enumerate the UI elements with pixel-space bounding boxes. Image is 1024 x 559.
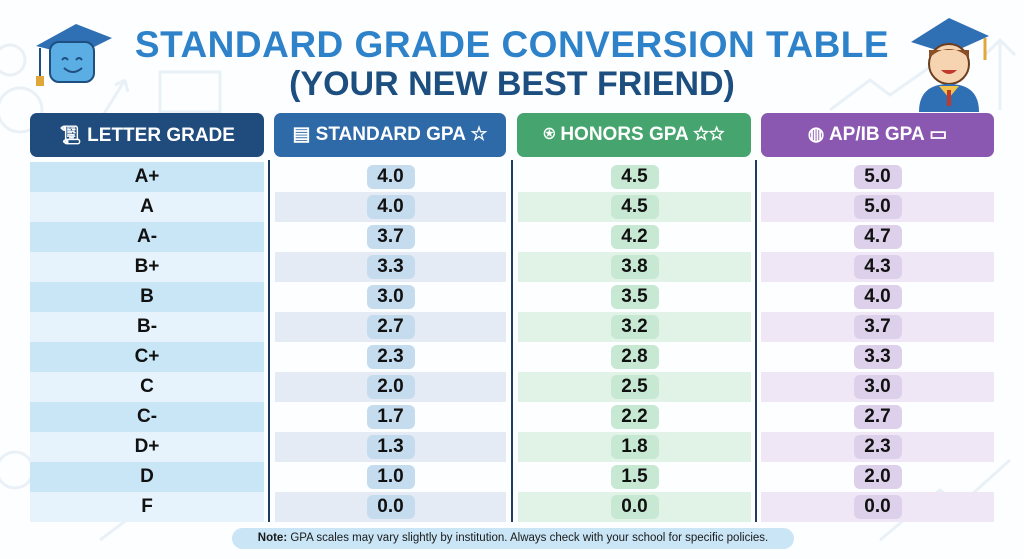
- header: standard gpa: ▤ STANDARD GPA ☆: [292, 124, 488, 145]
- table rows: 1.3: [377, 436, 404, 457]
- table rows: C+: [135, 346, 159, 367]
- table rows: 3.0: [377, 286, 404, 307]
- table rows: C: [140, 376, 154, 397]
- header: letter grade: [30, 113, 264, 157]
- table rows: 0.0: [377, 496, 404, 517]
- table rows: 2.3: [377, 346, 404, 367]
- table rows: A: [140, 196, 154, 217]
- header: ap/ib gpa: [761, 113, 994, 157]
- icon: smiling graduation cap: [36, 24, 112, 86]
- table rows: 3.7: [864, 316, 891, 337]
- header: standard gpa: [274, 113, 506, 157]
- table rows: 3.2: [621, 316, 648, 337]
- table rows: D: [140, 466, 154, 487]
- table rows: 5.0: [864, 166, 891, 187]
- icon: graduate student: [911, 18, 989, 112]
- table rows: 3.8: [621, 256, 648, 277]
- table rows: 4.3: [864, 256, 891, 277]
- header: honors gpa: [517, 113, 751, 157]
- table rows: 4.0: [864, 286, 891, 307]
- table rows: 4.2: [621, 226, 648, 247]
- table rows: C-: [137, 406, 157, 427]
- note callout: [232, 528, 794, 549]
- table rows: 4.5: [621, 196, 648, 217]
- table rows: 4.7: [864, 226, 891, 247]
- table rows: 1.8: [621, 436, 648, 457]
- header: letter grade: 📜︎ LETTER GRADE: [59, 125, 235, 146]
- header: ap/ib gpa: ◍ AP/IB GPA ▭: [808, 124, 947, 145]
- table rows: D+: [135, 436, 159, 457]
- table rows: 3.3: [864, 346, 891, 367]
- table rows: A+: [135, 166, 159, 187]
- table rows: 5.0: [864, 196, 891, 217]
- table rows: A-: [137, 226, 157, 247]
- table rows: 2.0: [864, 466, 891, 487]
- table rows: F: [141, 496, 153, 517]
- table rows: 3.3: [377, 256, 404, 277]
- subtitle: (YOUR NEW BEST FRIEND): [289, 65, 735, 103]
- table rows: 2.8: [621, 346, 648, 367]
- table rows: 4.0: [377, 196, 404, 217]
- note callout: Note: GPA scales may vary slightly by institution. Always check with your school for specific policies.: [258, 532, 768, 544]
- table rows: B: [140, 286, 154, 307]
- column dividers: [268, 160, 270, 522]
- table rows: 1.5: [621, 466, 648, 487]
- table rows: 2.7: [377, 316, 404, 337]
- table rows: 4.5: [621, 166, 648, 187]
- header: honors gpa: ⍟ HONORS GPA ☆☆: [544, 124, 724, 145]
- table rows: 0.0: [864, 496, 891, 517]
- table rows: B-: [137, 316, 157, 337]
- table rows: 2.7: [864, 406, 891, 427]
- table rows: 3.7: [377, 226, 404, 247]
- table rows: 2.0: [377, 376, 404, 397]
- table rows: 3.0: [864, 376, 891, 397]
- table rows: 1.0: [377, 466, 404, 487]
- table rows: B+: [135, 256, 159, 277]
- table rows: 2.5: [621, 376, 648, 397]
- title: STANDARD GRADE CONVERSION TABLE: [135, 24, 889, 65]
- table rows: 2.3: [864, 436, 891, 457]
- table rows: 1.7: [377, 406, 404, 427]
- table rows: 0.0: [621, 496, 648, 517]
- table rows: 4.0: [377, 166, 404, 187]
- table rows: 3.5: [621, 286, 648, 307]
- table rows: 2.2: [621, 406, 648, 427]
